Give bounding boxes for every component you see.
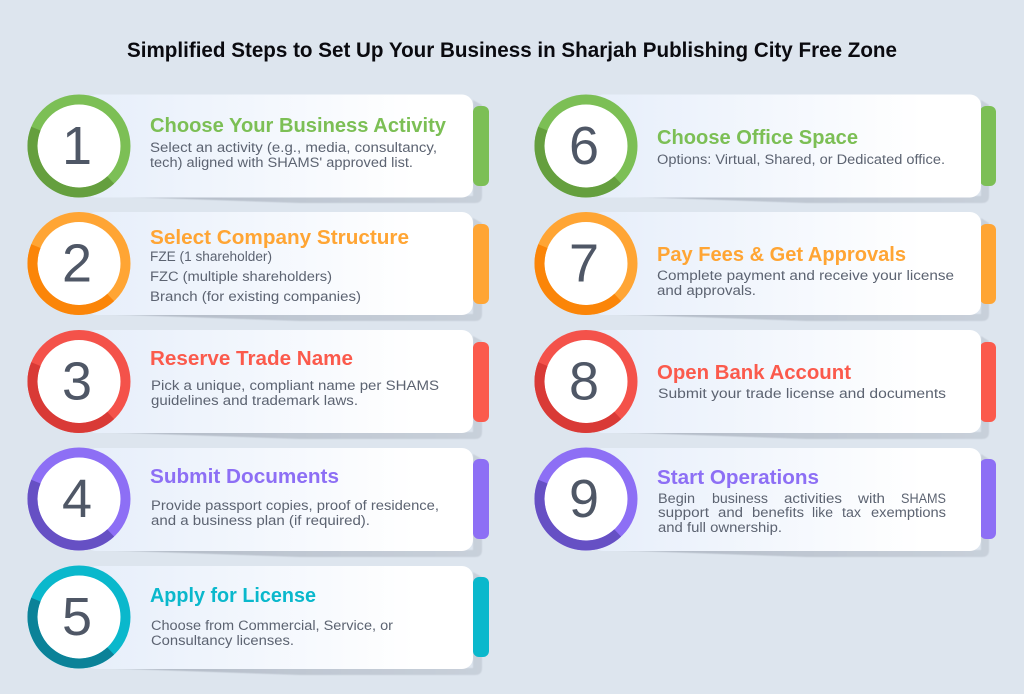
- step 4 card: Submit Documents: [150, 465, 339, 488]
- step 9 card: activities: [784, 491, 842, 506]
- step 1 card: 1: [62, 116, 92, 176]
- step 9 card: business: [712, 491, 768, 506]
- step 1 card: [32, 94, 489, 203]
- title: Simplified Steps to Set Up Your Business in Sharjah Publishing City Free Zone: [127, 39, 897, 62]
- step 5 card: 5: [62, 587, 92, 647]
- step 6 card: Options: Virtual, Shared, or Dedicated office.: [657, 152, 945, 167]
- step 9 card: support: [658, 505, 709, 520]
- step 9 card: with: [857, 491, 885, 506]
- step 8 card: Submit your trade license and documents: [658, 386, 946, 401]
- step 9 card: [540, 448, 996, 557]
- step 6 card: 6: [569, 116, 599, 176]
- step 5 card: Choose from Commercial, Service, or: [151, 618, 394, 633]
- step 8 card: Open Bank Account: [657, 361, 851, 384]
- step 1 card: tech) aligned with SHAMS' approved list.: [150, 155, 413, 170]
- step 3 card: Reserve Trade Name: [150, 347, 353, 370]
- step 1 card: Choose Your Business Activity: [150, 114, 447, 137]
- step 4 card: [32, 448, 489, 557]
- step 2 card: Branch (for existing companies): [150, 289, 361, 304]
- step 8 card: [540, 330, 996, 439]
- step 9 card: exemptions: [871, 505, 946, 520]
- step 3 card: guidelines and trademark laws.: [151, 393, 358, 408]
- step 9 card: like: [812, 505, 833, 520]
- step 2 card: FZC (multiple shareholders): [150, 269, 332, 284]
- step 6 card: [540, 94, 996, 203]
- step 3 card: 3: [62, 352, 92, 412]
- step 3 card: Pick a unique, compliant name per SHAMS: [151, 378, 439, 393]
- step 2 card: 2: [62, 234, 92, 294]
- step 2 card: [32, 212, 489, 321]
- step 7 card: Complete payment and receive your license: [657, 268, 954, 283]
- step 9 card: benefits: [752, 505, 804, 520]
- step 9 card: Start Operations: [657, 466, 819, 489]
- step 7 card: 7: [569, 234, 599, 294]
- step 2 card: Select Company Structure: [150, 226, 409, 249]
- step 5 card: [32, 566, 489, 675]
- step 1 card: Select an activity (e.g., media, consultancy,: [150, 140, 437, 155]
- step 5 card: Apply for License: [150, 584, 316, 607]
- step 9 card: 9: [569, 469, 599, 529]
- step 5 card: Consultancy licenses.: [151, 633, 294, 648]
- step 2 card: FZE (1 shareholder): [150, 249, 272, 264]
- step 9 card: tax: [842, 505, 861, 520]
- step 7 card: and approvals.: [657, 283, 756, 298]
- step 9 card: and: [718, 505, 743, 520]
- step 7 card: [540, 212, 996, 321]
- step 7 card: Pay Fees & Get Approvals: [657, 243, 906, 266]
- step 9 card: Begin: [658, 491, 695, 506]
- step 4 card: 4: [62, 469, 92, 529]
- step 9 card: SHAMS: [901, 491, 946, 506]
- step 4 card: and a business plan (if required).: [151, 513, 370, 528]
- step 6 card: Choose Office Space: [657, 126, 858, 149]
- step 9 card: and full ownership.: [658, 520, 782, 535]
- step 4 card: Provide passport copies, proof of residence,: [151, 498, 439, 513]
- step 3 card: [32, 330, 489, 439]
- step 8 card: 8: [569, 352, 599, 412]
